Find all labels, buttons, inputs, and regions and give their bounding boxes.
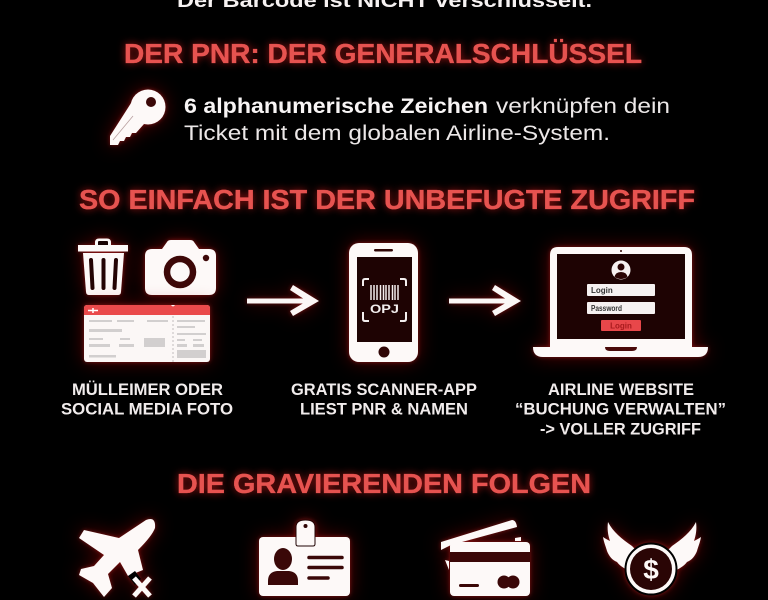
icon: credit cards (441, 520, 530, 596)
text block: PNR explanation (184, 95, 670, 145)
label: step 3 (515, 381, 726, 438)
arrow 1 (247, 285, 319, 316)
icon: laptop with login form: Password (591, 304, 622, 313)
text block: PNR explanation: Ticket mit dem globalen Airline-System. (184, 122, 610, 145)
label: step 2: LIEST PNR & NAMEN (300, 400, 468, 418)
icon: ID badge (259, 520, 350, 596)
heading: PNR: DER PNR: DER GENERALSCHLÜSSEL (124, 38, 642, 69)
icon: phone with scanner: OPJ (370, 302, 399, 316)
icon: camera (145, 240, 216, 295)
label: step 3: -> VOLLER ZUGRIFF (540, 420, 701, 438)
text block: PNR explanation: verknüpfen dein (496, 95, 670, 118)
label: step 3: “BUCHUNG VERWALTEN” (515, 400, 726, 418)
icon: key (110, 90, 166, 145)
arrow 2 (449, 285, 521, 316)
icon: cancelled flight (79, 519, 155, 597)
text block: PNR explanation: 6 alphanumerische Zeichen (184, 95, 488, 118)
label: step 2: GRATIS SCANNER-APP (291, 381, 477, 399)
icon: laptop with login form: Login (610, 322, 632, 330)
icon: laptop with login form (533, 247, 708, 357)
heading: consequences: DIE GRAVIERENDEN FOLGEN (177, 468, 591, 499)
label: step 1: MÜLLEIMER ODER (72, 380, 223, 399)
heading: unauthorized access: SO EINFACH IST DER UNBEFUGTE ZUGRIFF (79, 184, 695, 215)
label: step 3: AIRLINE WEBSITE (548, 381, 694, 399)
icon: money with wings (603, 522, 701, 594)
icon: phone with scanner (349, 243, 418, 362)
label: step 1 (61, 380, 233, 418)
icon: laptop with login form: Login (591, 286, 613, 295)
icon: money with wings: $ (643, 554, 659, 585)
label: step 2 (291, 381, 477, 418)
icon: trash can (78, 238, 128, 295)
icon: boarding pass (84, 305, 210, 362)
label: step 1: SOCIAL MEDIA FOTO (61, 400, 233, 418)
